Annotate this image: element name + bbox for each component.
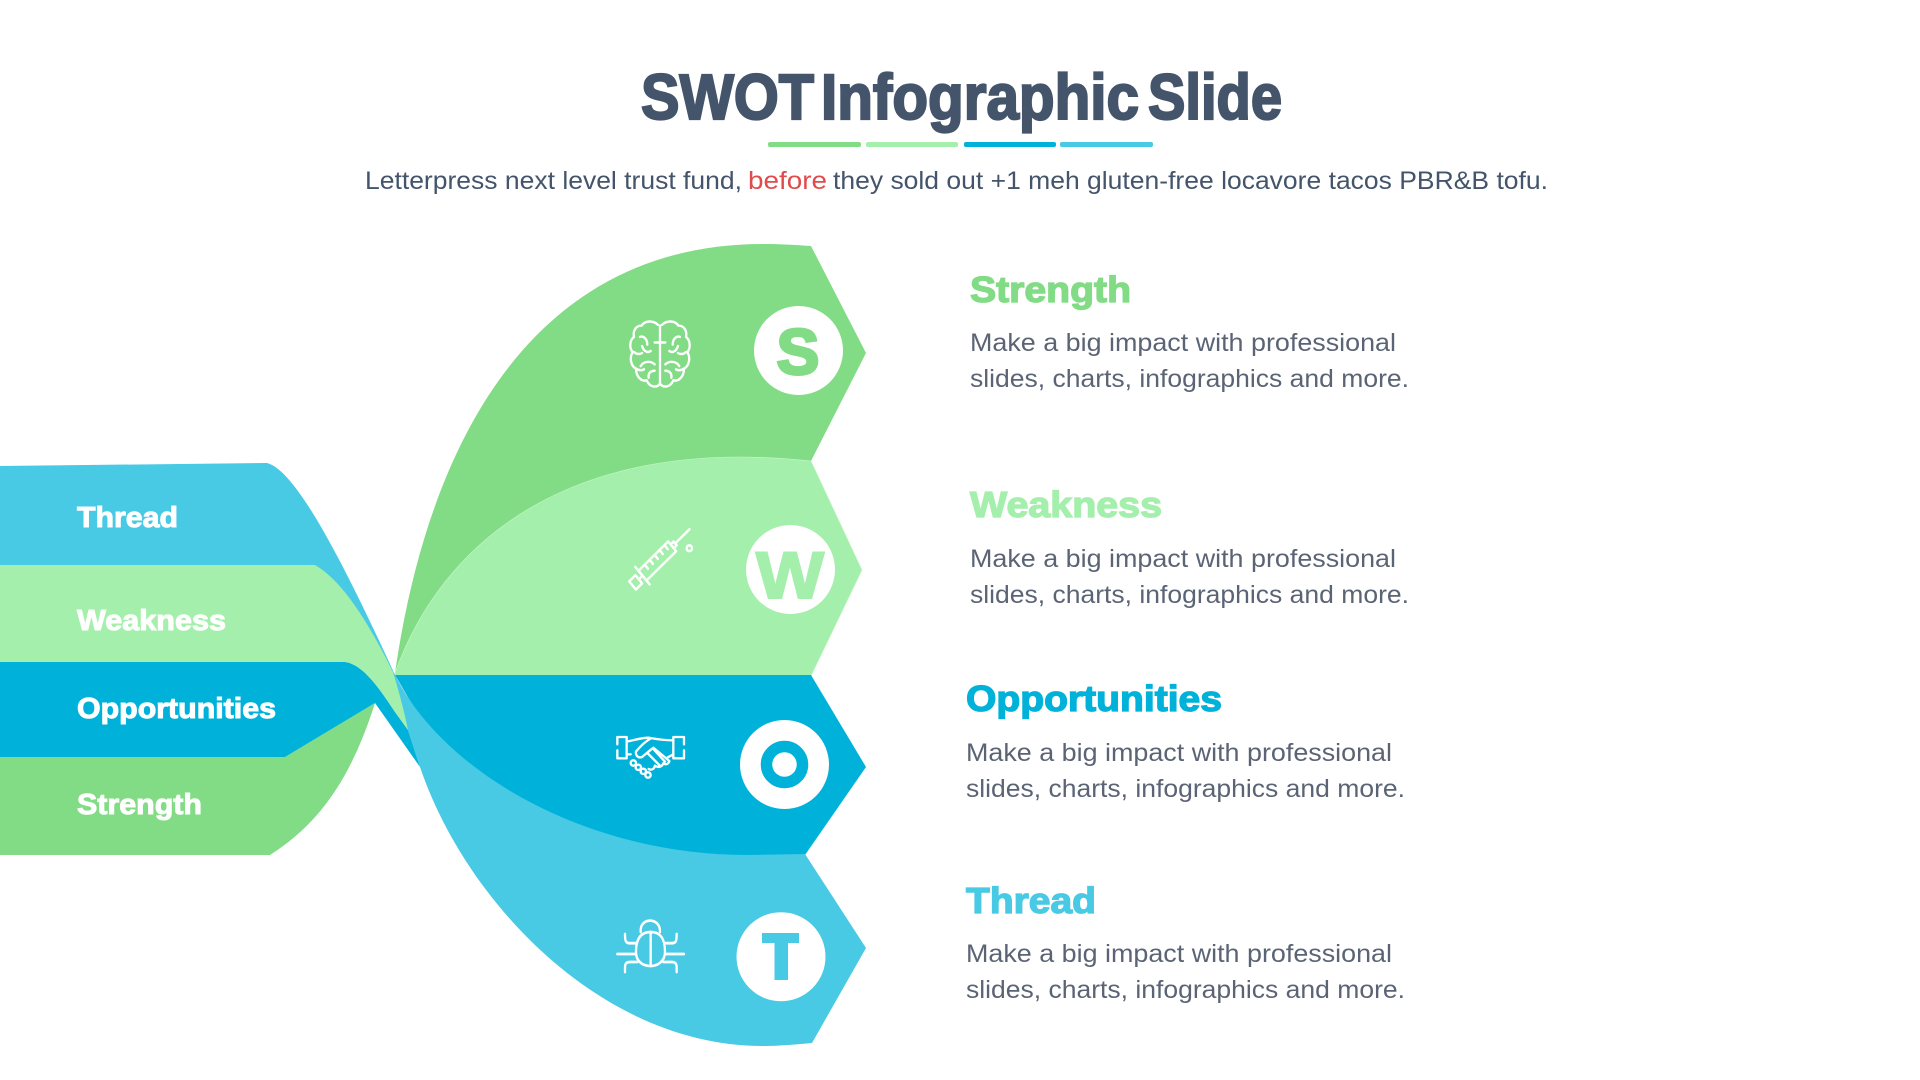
right petal: opportunities	[395, 675, 866, 855]
letter badge: W	[746, 525, 835, 614]
title: Slide	[1148, 61, 1282, 133]
title: Infographic	[821, 61, 1139, 133]
thread ribbon and right petal: threat	[0, 463, 866, 1046]
text block: strength: Strength	[970, 269, 1131, 310]
text block: thread: Thread	[966, 880, 1096, 921]
subtitle: before	[748, 167, 827, 195]
title: SWOT	[641, 61, 814, 133]
letter badge: S: S	[777, 316, 819, 388]
text block: opportunities	[966, 678, 1405, 803]
text block: strength	[970, 269, 1409, 393]
title	[641, 61, 1282, 133]
left band labels	[77, 502, 276, 821]
text block: weakness: Make a big impact with professional	[970, 545, 1396, 573]
text block: weakness: Weakness	[970, 484, 1162, 525]
text block: weakness: slides, charts, infographics and more.	[970, 581, 1409, 609]
left band labels: Thread	[77, 502, 178, 534]
text block: strength: slides, charts, infographics and more.	[970, 365, 1409, 393]
text block: strength: Make a big impact with professional	[970, 329, 1396, 357]
subtitle	[365, 167, 1548, 195]
text block: opportunities: Opportunities	[966, 678, 1222, 719]
letter badge: T	[736, 912, 826, 1001]
left band: opportunities	[0, 662, 420, 767]
text block: thread	[966, 880, 1405, 1004]
right petal: strength	[395, 244, 866, 680]
left band: weakness	[0, 565, 408, 730]
left band labels: Weakness	[77, 605, 226, 637]
icon: brain	[630, 322, 690, 387]
text block: opportunities: Make a big impact with professional	[966, 739, 1392, 767]
left band: strength	[0, 703, 375, 855]
left band labels: Strength	[77, 789, 202, 821]
icon: syringe	[625, 521, 697, 594]
text block: weakness	[970, 484, 1409, 609]
subtitle: Letterpress next level trust fund,	[365, 167, 742, 195]
left band labels: Opportunities	[77, 693, 276, 725]
text block: thread: Make a big impact with professional	[966, 940, 1392, 968]
letter badge: S	[754, 306, 843, 395]
title underline bars	[768, 142, 1153, 147]
text block: thread: slides, charts, infographics and more.	[966, 976, 1405, 1004]
subtitle: they sold out +1 meh gluten-free locavore tacos PBR&B tofu.	[833, 167, 1548, 195]
right petal: weakness	[395, 457, 862, 676]
letter badge: O	[740, 720, 829, 809]
letter badge: W: W	[756, 538, 825, 612]
icon: handshake	[617, 737, 684, 778]
icon: bug	[617, 921, 684, 972]
text block: opportunities: slides, charts, infographics and more.	[966, 775, 1405, 803]
